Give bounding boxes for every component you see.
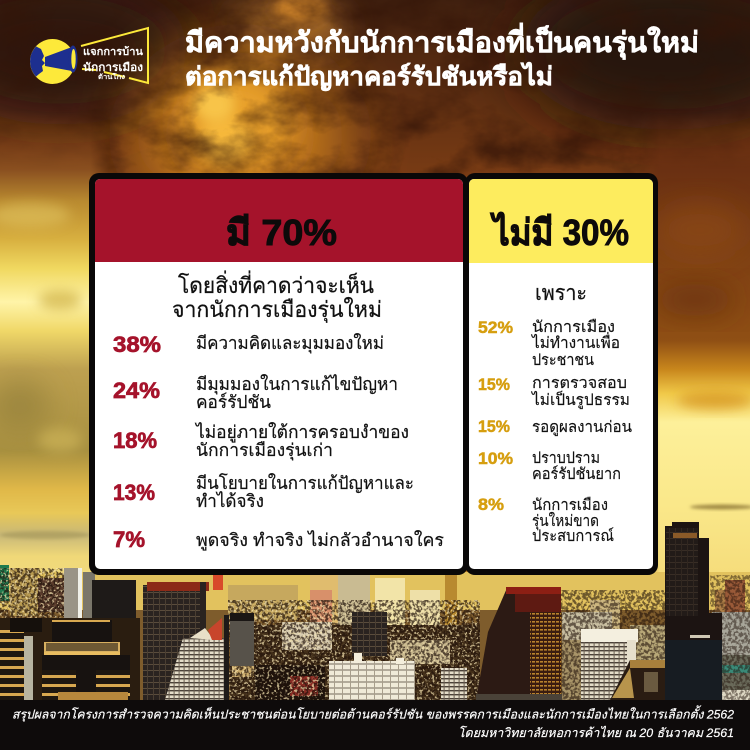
footer source text: สรุปผลจากโครงการสำรวจความคิดเห็นประชาชนต่อนโยบายต่อต้านคอร์รัปชัน ของพรรคการเมืองและนักการเมืองไทยในการเลือกตั้ง 2562 [12,704,734,722]
panel: yes 70% [89,173,468,575]
item: 18% [113,422,409,461]
item: 13% [113,473,414,511]
reason: 15% wait: รอดูผลงานก่อน [532,419,632,437]
building: white grid tower [581,629,680,700]
reason: 8%: 8% [478,496,504,514]
reason: 10%: 10% [478,450,513,468]
item: 24%: คอร์รัปชัน [196,392,271,412]
logo wordmark: แจกการบ้าน [83,45,144,58]
item: 13%: 13% [113,480,155,505]
reason: 15% wait [478,418,632,437]
reason: 15% wait: 15% [478,418,510,436]
reason: 10%: คอร์รัปชันยาก [532,465,621,483]
reason: 52%: นักการเมือง [532,318,615,336]
logo: megaphone badge [30,28,148,84]
item: 18%: ไม่อยู่ภายใต้การครอบงำของ [194,422,409,443]
item: 13%: ทำได้จริง [196,491,264,511]
subheading: expectations: โดยสิ่งที่คาดว่าจะเห็น [178,270,374,298]
building: left stepped black tower [0,618,130,700]
title: ต่อการแก้ปัญหาคอร์รัปชันหรือไม่ [185,61,553,91]
item: 24%: มีมุมมองในการแก้ไขปัญหา [196,374,398,395]
subheading: expectations [172,270,382,323]
reason: 8%: นักการเมือง [532,496,608,514]
title [185,22,699,91]
reason: 10%: ปราบปราม [532,450,600,467]
footer source text [12,704,734,740]
logo wordmark [83,45,144,81]
reason: 8% [478,496,614,545]
reason: 15% audit: การตรวจสอบ [532,375,627,392]
subheading: because: เพราะ [535,282,587,305]
subheading: expectations: จากนักการเมืองรุ่นใหม่ [172,297,382,323]
panel header: no [469,179,653,263]
item: 38% [113,332,384,357]
reason: 52% [478,318,620,369]
reason: 52%: ประชาชน [532,352,594,369]
title: มีความหวังกับนักการเมืองที่เป็นคนรุ่นใหม่ [185,22,699,60]
reason: 52%: 52% [478,319,513,337]
reason: 8%: ประสบการณ์ [532,527,614,545]
building: dark red-topped tower [476,587,562,700]
item: 38%: มีความคิดและมุมมองใหม่ [196,333,384,354]
reason: 15% audit [478,375,630,410]
building: white office block [329,653,467,700]
reason: 15% audit: 15% [478,376,510,394]
item: 24%: 24% [113,378,160,403]
item: 38%: 38% [113,332,161,357]
item: 18%: 18% [113,428,157,453]
footer band [0,700,750,750]
item: 18%: นักการเมืองรุ่นเก่า [196,440,333,461]
background: sunset sky over city [0,0,750,572]
building: grey gridded tower [165,613,254,700]
panel: no 30% [465,173,658,575]
panel header: yes [95,179,463,262]
panel header: no: ไม่มี 30% [489,211,629,253]
reason: 52%: ไม่ทำงานเพื่อ [530,332,620,352]
item: 7% [113,527,444,552]
logo wordmark: ต้านโกง [98,72,125,81]
panel header: yes: มี 70% [226,212,337,253]
item: 24% [113,374,398,412]
city skyline [0,565,750,700]
building: tall dark tower [143,582,209,700]
item: 7%: 7% [113,527,145,552]
logo wordmark: นักการเมือง [83,61,143,74]
building: tall right dark tower [665,522,722,700]
footer source text: โดยมหาวิทยาลัยหอการค้าไทย ณ 20 ธันวาคม 2561 [458,725,734,740]
reason: 15% audit: ไม่เป็นรูปธรรม [530,390,630,410]
reason: 8%: รุ่นใหม่ขาด [532,512,599,531]
item: 13%: มีนโยบายในการแก้ปัญหาและ [196,473,414,493]
item: 7%: พูดจริง ทำจริง ไม่กลัวอำนาจใคร [196,530,444,551]
reason: 10% [478,450,621,483]
